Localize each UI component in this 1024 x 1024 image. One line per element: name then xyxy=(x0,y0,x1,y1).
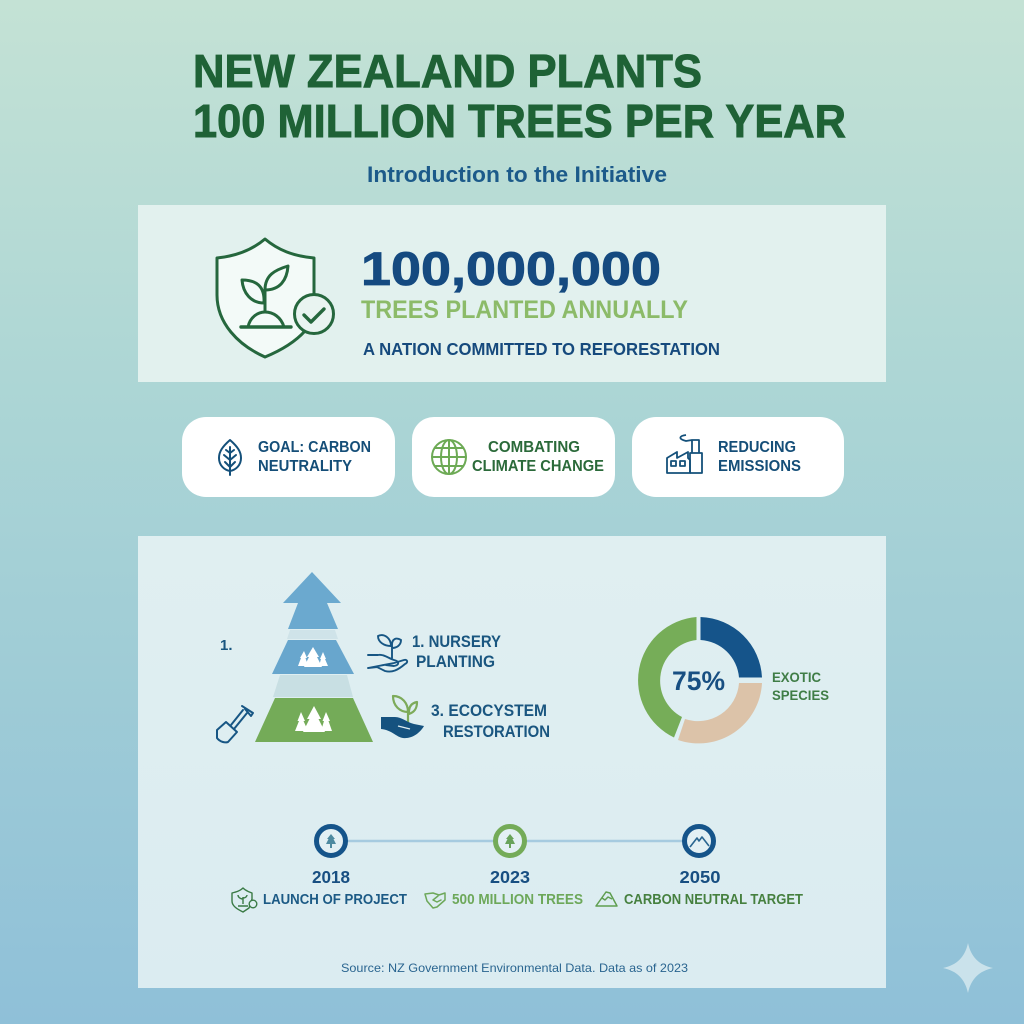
tier: faded band lower xyxy=(273,675,353,697)
title: 100 MILLION TREES PER YEAR xyxy=(193,95,846,147)
marker: 2023 xyxy=(496,826,524,856)
icon: handshake xyxy=(425,893,445,908)
card: reducing emissions xyxy=(632,417,844,497)
tagline: A NATION COMMITTED TO REFORESTATION xyxy=(363,339,720,359)
icon: trees upper xyxy=(298,647,328,667)
big number: 100,000,000 xyxy=(361,242,661,295)
tier: green trapezoid xyxy=(255,698,373,742)
card text xyxy=(258,439,371,475)
timeline xyxy=(232,826,803,912)
icon: globe xyxy=(432,440,466,474)
title: NEW ZEALAND PLANTS xyxy=(193,45,702,97)
milestone: carbon neutral target: CARBON NEUTRAL TARGET xyxy=(624,892,803,908)
panel: process, species and timeline xyxy=(138,536,886,988)
icon: factory xyxy=(667,435,702,473)
text: ecosystem restoration: 3. ECOCYSTEM xyxy=(431,702,547,720)
card: carbon neutrality xyxy=(182,417,395,497)
pyramid tree chart xyxy=(255,572,373,742)
tier: blue trapezoid xyxy=(272,640,354,674)
green subheading: TREES PLANTED ANNUALLY xyxy=(361,296,688,324)
segment: green xyxy=(638,617,696,738)
card text: GOAL: CARBON xyxy=(258,439,371,456)
text: ecosystem restoration xyxy=(431,702,550,741)
card: climate change xyxy=(412,417,615,497)
icon: mountain xyxy=(690,837,709,847)
subtitle: Introduction to the Initiative xyxy=(367,162,667,187)
text: ecosystem restoration: RESTORATION xyxy=(443,723,550,741)
marker: 2018 xyxy=(316,826,346,856)
year labels: 2023 xyxy=(490,867,530,887)
card text xyxy=(718,439,801,475)
icon: leaf xyxy=(219,440,241,475)
segment: navy xyxy=(700,617,762,678)
donut chart xyxy=(638,617,762,743)
year labels xyxy=(312,867,721,887)
icon: dark hand with green sprout xyxy=(381,696,424,738)
icon: mountain outline xyxy=(596,892,617,906)
card text: EMISSIONS xyxy=(718,458,801,475)
donut label: SPECIES xyxy=(772,688,829,703)
milestone: 500 million trees: 500 MILLION TREES xyxy=(452,892,583,908)
milestone: launch of project: LAUNCH OF PROJECT xyxy=(263,892,407,908)
card text xyxy=(472,439,604,475)
icon: trees lower xyxy=(295,706,332,732)
year labels: 2018 xyxy=(312,867,350,887)
card text: NEUTRALITY xyxy=(258,458,353,475)
tier: faded band upper xyxy=(287,630,338,639)
icon: shovel xyxy=(217,706,253,742)
donut label: EXOTIC xyxy=(772,670,821,685)
icon: small green tree xyxy=(505,834,515,848)
card text: CLIMATE CHANGE xyxy=(472,458,604,475)
segment: tan xyxy=(678,683,762,743)
icon: sparkle xyxy=(943,943,993,993)
icon: hand with sprout (nursery) xyxy=(368,635,407,672)
text: nursery planting xyxy=(412,633,501,671)
source note: Source: NZ Government Environmental Data. Data as of 2023 xyxy=(341,961,688,975)
icon: small tree xyxy=(326,834,336,848)
card text: REDUCING xyxy=(718,439,796,456)
text: nursery planting: 1. NURSERY xyxy=(412,633,501,651)
tier: top arrow xyxy=(283,572,341,629)
text: nursery planting: PLANTING xyxy=(416,653,495,671)
donut label xyxy=(772,670,829,703)
marker: 2050 xyxy=(684,826,714,856)
card text: COMBATING xyxy=(488,439,580,456)
title xyxy=(193,45,846,147)
panel: headline statistic xyxy=(138,205,886,382)
year labels: 2050 xyxy=(680,867,721,887)
label: step one number: 1. xyxy=(220,637,233,654)
donut value: 75% xyxy=(672,666,725,696)
icon: mini shield xyxy=(232,888,257,912)
icon: shield with sprout and check xyxy=(217,239,334,357)
